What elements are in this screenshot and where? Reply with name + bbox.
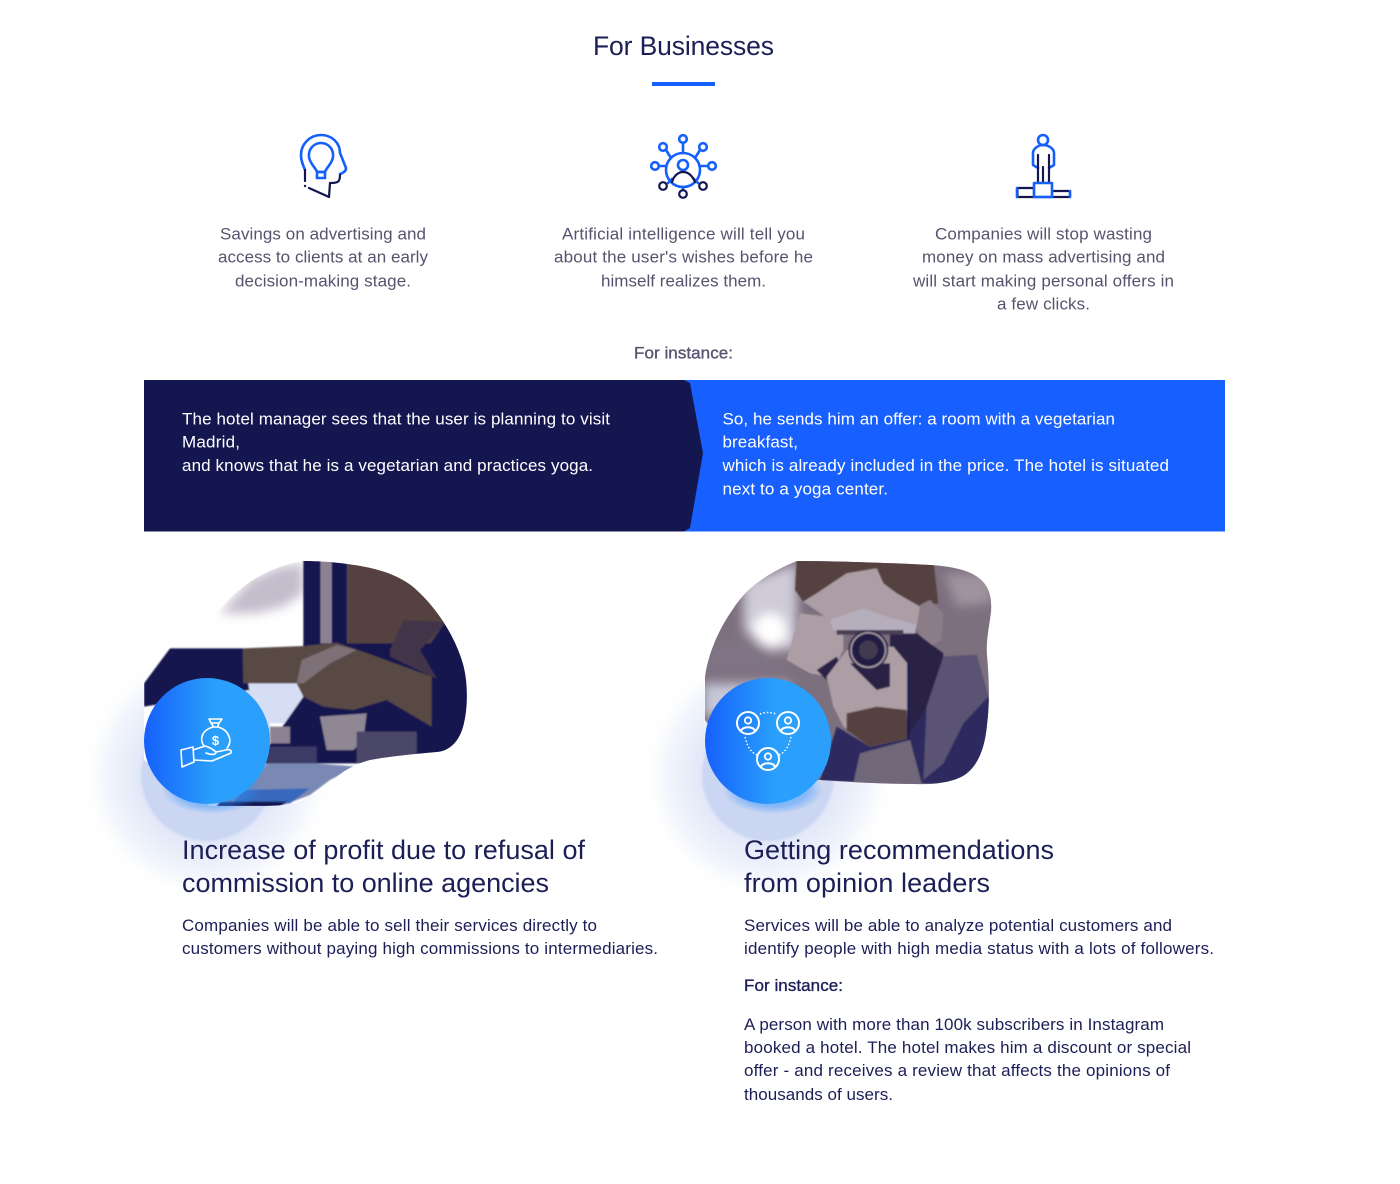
panel: offer (blue) (684, 380, 1225, 532)
panel: hotel manager (navy): The hotel manager sees that the user is planning to visit (182, 410, 610, 428)
text: artificial intelligence (554, 224, 813, 290)
text: savings: access to clients at an early (218, 248, 428, 266)
section: increase of profit (79, 555, 658, 958)
photo: handshake (140, 555, 477, 815)
text: artificial intelligence: about the user's wishes before he (554, 248, 813, 266)
photo: man with camera (700, 555, 995, 790)
text: artificial intelligence: himself realizes them. (601, 272, 766, 290)
example banner (144, 380, 1225, 532)
example text: thousands of users. (744, 1085, 893, 1104)
heading: from opinion leaders (744, 868, 990, 898)
example text: booked a hotel. The hotel makes him a discount or special (744, 1038, 1191, 1057)
panel: offer (blue): breakfast, (722, 432, 798, 452)
text: artificial intelligence: Artificial intelligence will tell you (562, 224, 805, 244)
title underline (652, 82, 715, 86)
panel: offer (blue): next to a yoga center. (722, 480, 888, 498)
heading: commission to online agencies (182, 868, 549, 898)
text: personal offers: money on mass advertising and (922, 248, 1165, 266)
text: personal offers: Companies will stop wasting (935, 224, 1152, 244)
label: for instance: For instance: (744, 976, 843, 995)
text: personal offers: a few clicks. (997, 294, 1090, 314)
body text: Companies will be able to sell their services directly to (182, 916, 597, 935)
panel: hotel manager (navy): and knows that he is a vegetarian and practices yoga. (182, 456, 593, 475)
icon: three connected people (737, 712, 799, 770)
heading: Increase of profit due to refusal of (182, 835, 585, 865)
text: savings: Savings on advertising and (220, 224, 426, 244)
body text: identify people with high media status with a lots of followers. (744, 939, 1214, 958)
example text (744, 1015, 1191, 1104)
glow under badge (723, 766, 823, 814)
section: opinion leaders (640, 555, 1214, 1104)
icon: hand holding money bag: $ (212, 733, 220, 748)
label: for instance: For instance: (634, 344, 733, 362)
benefit: savings on advertising (218, 135, 428, 290)
panel: hotel manager (navy): Madrid, (182, 432, 240, 452)
background glow (640, 647, 896, 903)
panel: hotel manager (navy) (144, 380, 703, 532)
heading (744, 835, 1054, 898)
panel: offer (blue): which is already included in the price. The hotel is situated (722, 456, 1169, 475)
icon: network around a person (651, 135, 716, 198)
body text (182, 916, 658, 958)
badge: connected people (705, 678, 831, 804)
heading: Getting recommendations (744, 835, 1054, 865)
icon: person on podium (1017, 135, 1070, 197)
badge: money in hand (144, 678, 270, 804)
text: savings (218, 224, 428, 290)
icon: head with light bulb (301, 135, 346, 197)
panel: offer (blue): So, he sends him an offer: a room with a vegetarian (722, 410, 1115, 428)
title: For Businesses (593, 31, 774, 61)
background glow (79, 647, 335, 903)
example text: A person with more than 100k subscribers in Instagram (744, 1015, 1164, 1034)
body text: customers without paying high commissions to intermediaries. (182, 939, 658, 958)
text: savings: decision-making stage. (235, 272, 411, 290)
text: personal offers (912, 224, 1174, 314)
benefit: personal offers (912, 135, 1174, 314)
heading (182, 835, 585, 898)
benefit: artificial intelligence (554, 135, 813, 290)
text: personal offers: will start making personal offers in (912, 272, 1174, 290)
example text: offer - and receives a review that affects the opinions of (744, 1061, 1170, 1080)
body text: Services will be able to analyze potential customers and (744, 916, 1172, 935)
body text (744, 916, 1214, 958)
glow under badge (162, 766, 262, 814)
